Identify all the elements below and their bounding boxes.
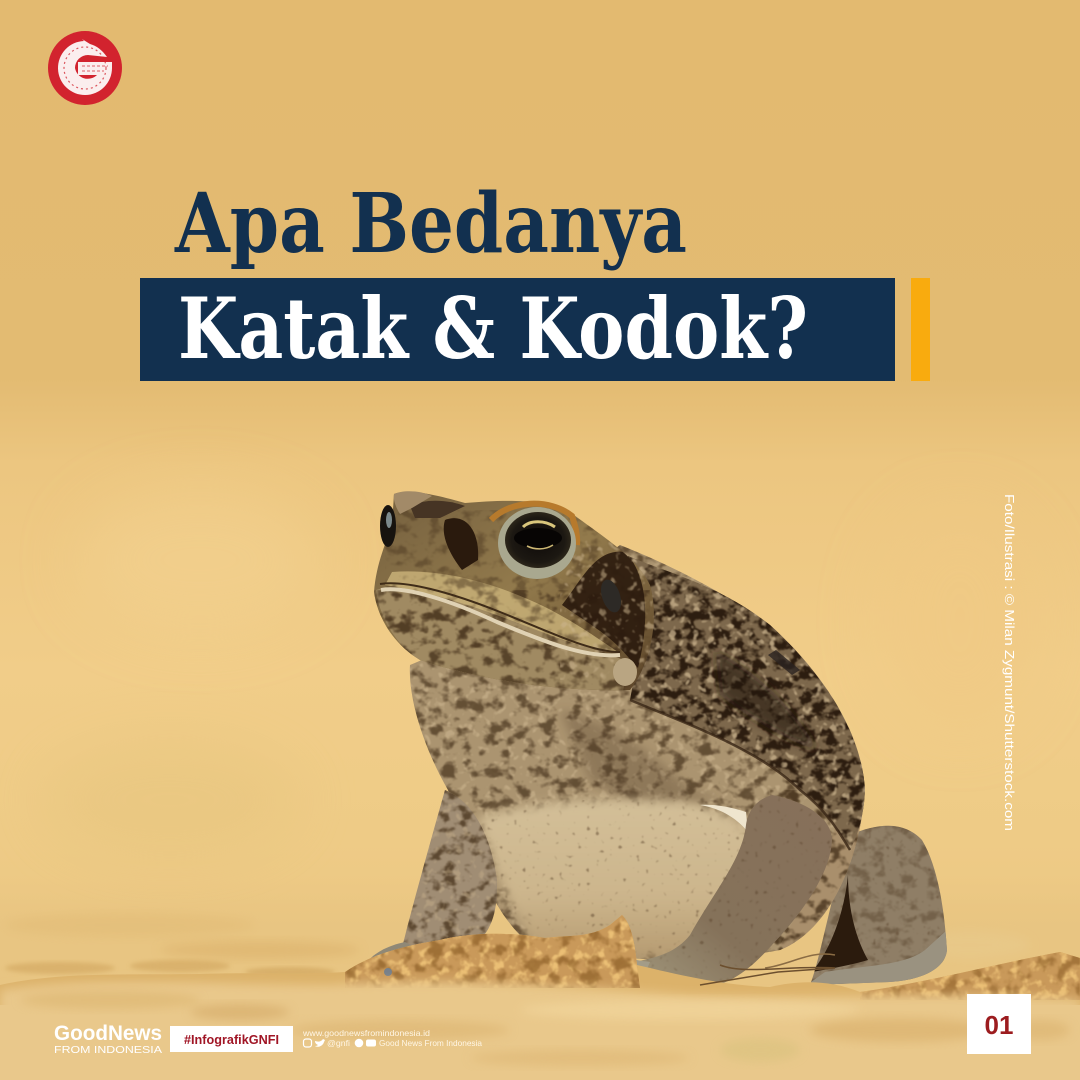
- footer brand: GoodNews: [54, 1022, 162, 1045]
- toad back with dark warts: [628, 556, 865, 850]
- toad left eye: [380, 505, 396, 547]
- toad right front leg: [636, 795, 832, 983]
- toad ear drum: [597, 577, 625, 615]
- logo badge: [48, 31, 122, 105]
- page number: [967, 994, 1031, 1054]
- footer brand: [54, 1022, 162, 1056]
- sandy ground behind the toad: [0, 880, 1080, 1080]
- toad parotoid gland: [613, 658, 637, 686]
- toad illustration: [367, 491, 960, 995]
- hashtag label: #InfografikGNFI: [184, 1032, 279, 1047]
- page number: 01: [985, 1010, 1013, 1040]
- title line one: Apa Bedanya: [174, 176, 687, 272]
- toad main eye: [491, 504, 577, 579]
- toad left front leg: [371, 790, 497, 958]
- footer links and social icons: @gnfi: [327, 1038, 350, 1048]
- toad body and belly: [400, 540, 880, 970]
- photo credit: Foto/Ilustrasi : © Milan Zygmunt/Shutterstock.com: [1002, 494, 1016, 831]
- blurred foreground sand: [0, 982, 1080, 1080]
- toad head: [370, 491, 660, 700]
- title line two: Katak & Kodok?: [178, 279, 808, 378]
- hashtag label: [170, 1026, 293, 1052]
- footer links and social icons: [302, 1028, 482, 1048]
- sand mound and crumbs around the feet: [0, 915, 1080, 1005]
- toad snout bump: [394, 491, 432, 514]
- yellow accent bar: [911, 278, 930, 381]
- footer links and social icons: Good News From Indonesia: [379, 1038, 482, 1048]
- footer brand: FROM INDONESIA: [54, 1044, 162, 1056]
- footer links and social icons: www.goodnewsfromindonesia.id: [302, 1028, 430, 1038]
- toad chin lip: [381, 589, 620, 655]
- title bar: [140, 278, 895, 381]
- toad mouth line: [380, 583, 620, 652]
- toad hind leg: [811, 826, 947, 984]
